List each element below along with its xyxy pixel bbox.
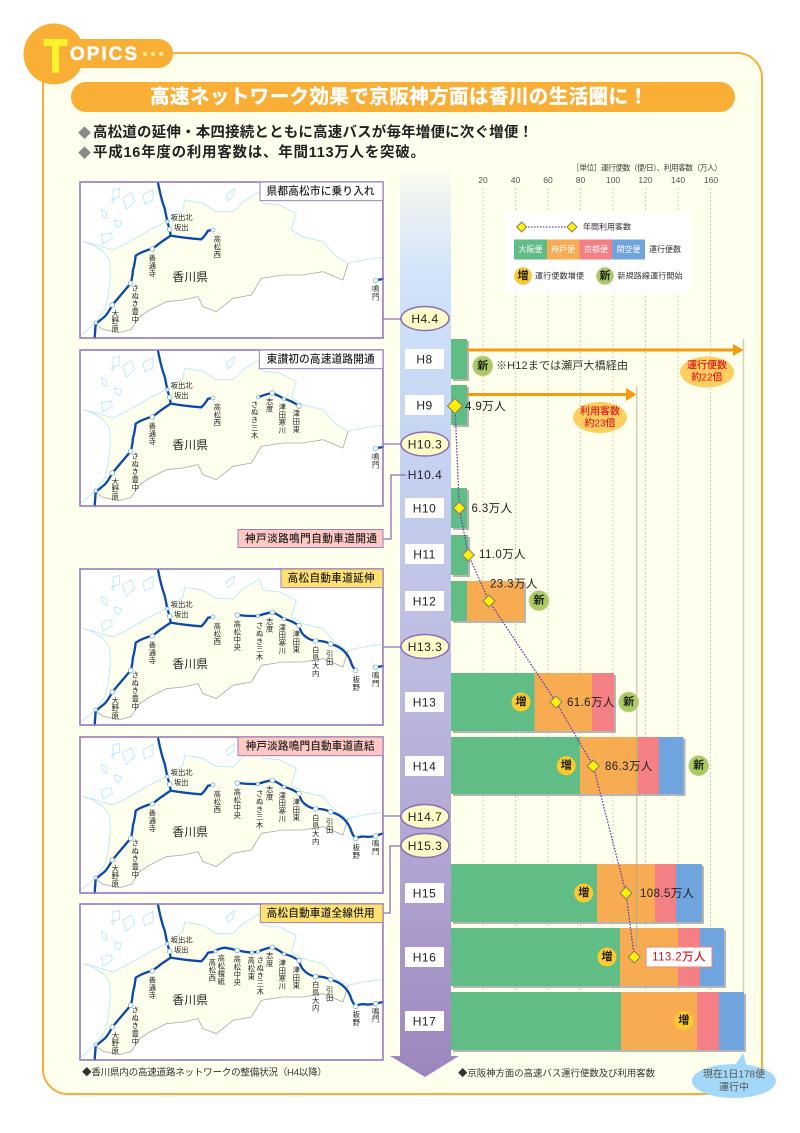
map: H15.3: さぬき豊中	[130, 1006, 140, 1046]
label: Kobe Awaji Naruto expressway opening: 神戸淡路鳴門自動車道開通	[245, 532, 377, 545]
legend: 関空便	[616, 244, 640, 254]
map: H4.4: 香川県	[172, 271, 208, 284]
badge up H15: 増	[578, 885, 589, 899]
map: H15.3: 鳴門	[371, 1007, 380, 1024]
map: H15.3: 坂出北	[171, 935, 193, 944]
map: H14.7: 神戸淡路鳴門自動車道直結	[246, 739, 375, 752]
map: H15.3: 高松西	[207, 958, 217, 982]
map: H4.4: 県都高松市に乗り入れ	[267, 184, 375, 197]
passenger line	[455, 406, 634, 957]
map: H14.7: 高松西	[212, 789, 222, 814]
lead text: 高松道の延伸・本四接続とともに高速バスが毎年増便に次ぐ増便！	[93, 123, 533, 141]
map: H4.4: 坂出北	[171, 213, 193, 222]
map: H13.3: 志度	[265, 617, 274, 634]
map: H13.3: 高松西	[212, 621, 222, 646]
connector lines	[383, 319, 406, 913]
map: H13.3: 引田	[325, 649, 334, 666]
badge up H15	[574, 884, 593, 902]
map: H14.7: 坂出北	[171, 768, 193, 777]
chart caption: ◆京阪神方面の高速バス運行便数及び利用客数	[458, 1068, 656, 1078]
bar H9	[451, 385, 469, 427]
milestone labels: H10.3	[408, 438, 442, 452]
badge new H12: 新	[534, 593, 544, 607]
map: H4.4: 高松西	[212, 234, 222, 259]
badge new H13: 新	[623, 694, 634, 708]
legend: 新規路線運行開始	[618, 270, 682, 280]
map: H13.3	[80, 569, 383, 725]
year labels: H10	[413, 502, 436, 516]
map: H13.3: 高松自動車道延伸	[288, 571, 375, 584]
map: H14.7: 坂出	[174, 778, 189, 787]
map: H15.3: 大野原	[110, 1031, 120, 1055]
map: H13.3: 白鳥大内	[311, 645, 320, 678]
callout: current 178 services	[692, 1053, 776, 1098]
orange arrow: service increase	[467, 344, 744, 356]
map: H14.7: 津田東	[291, 798, 301, 822]
lead text: 平成16年度の利用客数は、年間113万人を突破。	[93, 143, 425, 161]
map: H10.3: 鳴門	[371, 452, 380, 469]
map: H15.3: 津田東	[291, 966, 301, 990]
badge up H14: 増	[561, 758, 572, 772]
bar H13	[451, 673, 616, 733]
map: H15.3: 津田寒川	[277, 959, 287, 990]
badge new H8: 新	[477, 358, 488, 372]
milestone labels: H4.4	[411, 312, 439, 326]
legend: 年間利用客数	[583, 222, 631, 232]
axis labels: 140	[671, 175, 685, 185]
passenger values: 23.3万人	[490, 578, 538, 590]
main title bar: 高速ネットワーク効果で京阪神方面は香川の生活圏に！	[150, 85, 648, 108]
map: H13.3: さぬき豊中	[130, 671, 140, 711]
map: H13.3: 坂出北	[171, 600, 193, 609]
map: H13.3: 高松中央	[232, 619, 242, 652]
callout: service 22x	[680, 356, 734, 388]
map: H14.7: 香川県	[172, 826, 208, 839]
year labels: H14	[413, 760, 436, 774]
map: H14.7: さぬき三木	[255, 790, 264, 829]
year labels	[405, 349, 444, 1031]
map: H10.3: 善通寺	[147, 421, 157, 445]
map: H13.3: 鳴門	[371, 671, 380, 688]
map: H14.7: さぬき豊中	[130, 839, 140, 879]
axis labels: 80	[576, 175, 585, 185]
bar H17	[451, 992, 746, 1052]
passenger values	[465, 400, 695, 900]
legend: 京都便	[584, 244, 608, 254]
axis labels: 120	[638, 175, 653, 185]
badge new H14: 新	[693, 758, 704, 772]
map: H15.3: 高松東	[246, 956, 256, 981]
map: H15.3: 板野	[351, 1010, 361, 1026]
highlight value H16: 113.2万人	[652, 950, 706, 964]
topics badge: T	[44, 30, 67, 82]
map: H10.3: 坂出	[174, 391, 189, 400]
lead text: ◆	[78, 146, 91, 160]
year labels: H8	[416, 352, 433, 366]
bar H16	[451, 928, 726, 988]
year labels: H9	[416, 398, 433, 412]
passenger values: 108.5万人	[640, 887, 695, 900]
badge up H14	[557, 756, 576, 775]
badge up H13: 増	[516, 694, 526, 708]
axis labels: 20	[478, 175, 488, 185]
badge new H12	[529, 591, 549, 611]
map: H10.3: 志度	[265, 397, 274, 414]
milestone labels: H15.3	[408, 839, 442, 853]
main title bar	[71, 82, 735, 112]
badge new H13	[619, 692, 639, 712]
map: H14.7: 高松中央	[232, 787, 242, 820]
map: H14.7: 鳴門	[371, 839, 380, 856]
map: H10.3: 高松西	[212, 402, 222, 427]
map: H4.4: 鳴門	[371, 284, 380, 301]
map: H15.3	[80, 904, 383, 1060]
map: H10.3: 香川県	[172, 439, 208, 452]
map: H14.7: 大野原	[110, 864, 120, 888]
legend: 増	[518, 268, 528, 282]
map: H13.3: 津田寒川	[277, 623, 287, 655]
callout: current 178 services: 現在1日178便	[703, 1068, 765, 1080]
highlight value H16	[646, 947, 712, 967]
passenger values: 86.3万人	[605, 760, 653, 773]
bar H14	[451, 737, 686, 796]
map: H10.3: 津田東	[291, 410, 301, 434]
map: H14.7: 引田	[325, 817, 334, 834]
milestone ovals	[401, 306, 449, 858]
passenger markers	[448, 398, 640, 963]
axis labels: 160	[704, 175, 718, 185]
passenger values: 4.9万人	[465, 400, 506, 413]
year labels: H10.4	[408, 468, 442, 482]
bar H8	[451, 339, 469, 381]
legend: 神戸便	[551, 244, 575, 254]
map: H15.3: 高松中央	[232, 954, 242, 987]
map: H4.4: 坂出	[174, 223, 189, 232]
year labels: H15	[413, 886, 436, 900]
map: H14.7: 津田寒川	[277, 791, 287, 823]
bar H10	[451, 488, 469, 530]
passenger values: 6.3万人	[472, 502, 513, 515]
map: H10.3: さぬき三木	[250, 400, 259, 440]
milestone labels	[408, 312, 442, 853]
legend	[505, 212, 690, 293]
topics badge	[24, 24, 173, 84]
bars: service counts	[451, 339, 746, 1052]
axis labels: 40	[511, 175, 520, 185]
axis labels: 100	[606, 175, 620, 185]
lead text: ◆	[78, 126, 91, 140]
callout: passengers 23x	[573, 402, 627, 433]
year labels: H13	[413, 696, 436, 710]
map: H10.3: さぬき豊中	[130, 452, 140, 492]
map caption: ◆香川県内の高速道路ネットワークの整備状況（H4以降）	[82, 1066, 327, 1078]
badge up H16	[598, 948, 616, 966]
map: H10.3	[80, 350, 383, 506]
map: H15.3: 坂出	[174, 945, 189, 954]
axis labels: 60	[543, 175, 553, 185]
badge new H8	[473, 356, 493, 376]
badge up H16: 増	[602, 949, 612, 963]
map: H14.7: 志度	[265, 785, 274, 802]
label: Kobe Awaji Naruto expressway opening	[238, 530, 383, 548]
map: H15.3: 善通寺	[147, 975, 157, 999]
badge up H13	[512, 692, 530, 712]
map: H15.3: 高松檀紙	[216, 953, 226, 986]
year labels: H11	[413, 548, 436, 562]
map: H13.3: 津田東	[291, 630, 301, 654]
milestone labels: H13.3	[408, 640, 442, 654]
bar H12	[451, 581, 526, 623]
map: H13.3: 大野原	[110, 696, 120, 720]
map: H4.4: 善通寺	[147, 253, 157, 277]
badge up H17: 増	[678, 1013, 689, 1027]
year labels: H17	[413, 1014, 436, 1028]
map: H13.3: 坂出	[174, 610, 189, 619]
axis labels	[478, 175, 718, 185]
lead text	[78, 123, 533, 161]
map: H10.3: 大野原	[110, 477, 120, 501]
map: H15.3: 高松自動車道全線供用	[267, 906, 375, 919]
map: H14.7: 板野	[351, 843, 361, 859]
timeline column arrow	[390, 172, 459, 1077]
map: H13.3: 板野	[351, 675, 361, 691]
callout: passengers 23x: 利用客数	[580, 404, 620, 418]
map: H13.3: 香川県	[172, 658, 208, 671]
legend: 新	[600, 268, 610, 282]
legend: 運行便数増便	[535, 270, 584, 280]
map: H15.3: さぬき三木	[255, 956, 265, 996]
map: H13.3: 善通寺	[147, 640, 157, 664]
callout: passengers 23x: 約23倍	[584, 416, 616, 430]
map: H4.4	[80, 182, 383, 338]
map: H4.4: 大野原	[110, 309, 120, 333]
map: H10.3: 坂出北	[171, 381, 193, 390]
year labels: H16	[413, 950, 436, 964]
topics badge: OPICS	[70, 44, 137, 65]
map: H15.3: 引田	[325, 985, 334, 1002]
bar H11	[451, 535, 470, 577]
legend: 運行便数	[649, 244, 681, 254]
map: H4.4: さぬき豊中	[130, 284, 140, 324]
badge up H17	[674, 1011, 693, 1030]
orange arrow: passenger increase	[467, 388, 636, 401]
badge new H14	[689, 756, 709, 776]
milestone labels: H14.7	[408, 810, 442, 824]
year labels: H12	[413, 594, 436, 608]
callout: current 178 services: 運行中	[719, 1080, 749, 1094]
legend: 大阪便	[518, 244, 542, 254]
map: H15.3: 香川県	[172, 994, 208, 1007]
unit note: ［単位］運行便数（便/日）、利用客数（万人）	[572, 162, 722, 172]
map: H10.3: 東讃初の高速道路開通	[267, 352, 375, 365]
map: H14.7: 善通寺	[147, 808, 157, 832]
map: H13.3: さぬき三木	[255, 622, 264, 661]
note H8: ※H12までは瀬戸大橋経由	[496, 358, 628, 372]
callout: service 22x: 運行便数	[687, 358, 727, 372]
map: H14.7: 白鳥大内	[311, 813, 320, 846]
map: H10.3: 津田寒川	[277, 403, 287, 434]
bar H15	[451, 864, 704, 924]
map: H15.3: 志度	[265, 951, 274, 968]
badges	[473, 356, 709, 1030]
passenger values: 11.0万人	[479, 548, 526, 561]
passenger values: 61.6万人	[567, 696, 615, 709]
map: H15.3: 白鳥大内	[311, 980, 320, 1013]
map: H14.7	[80, 737, 383, 893]
callout: service 22x: 約22倍	[691, 370, 723, 384]
